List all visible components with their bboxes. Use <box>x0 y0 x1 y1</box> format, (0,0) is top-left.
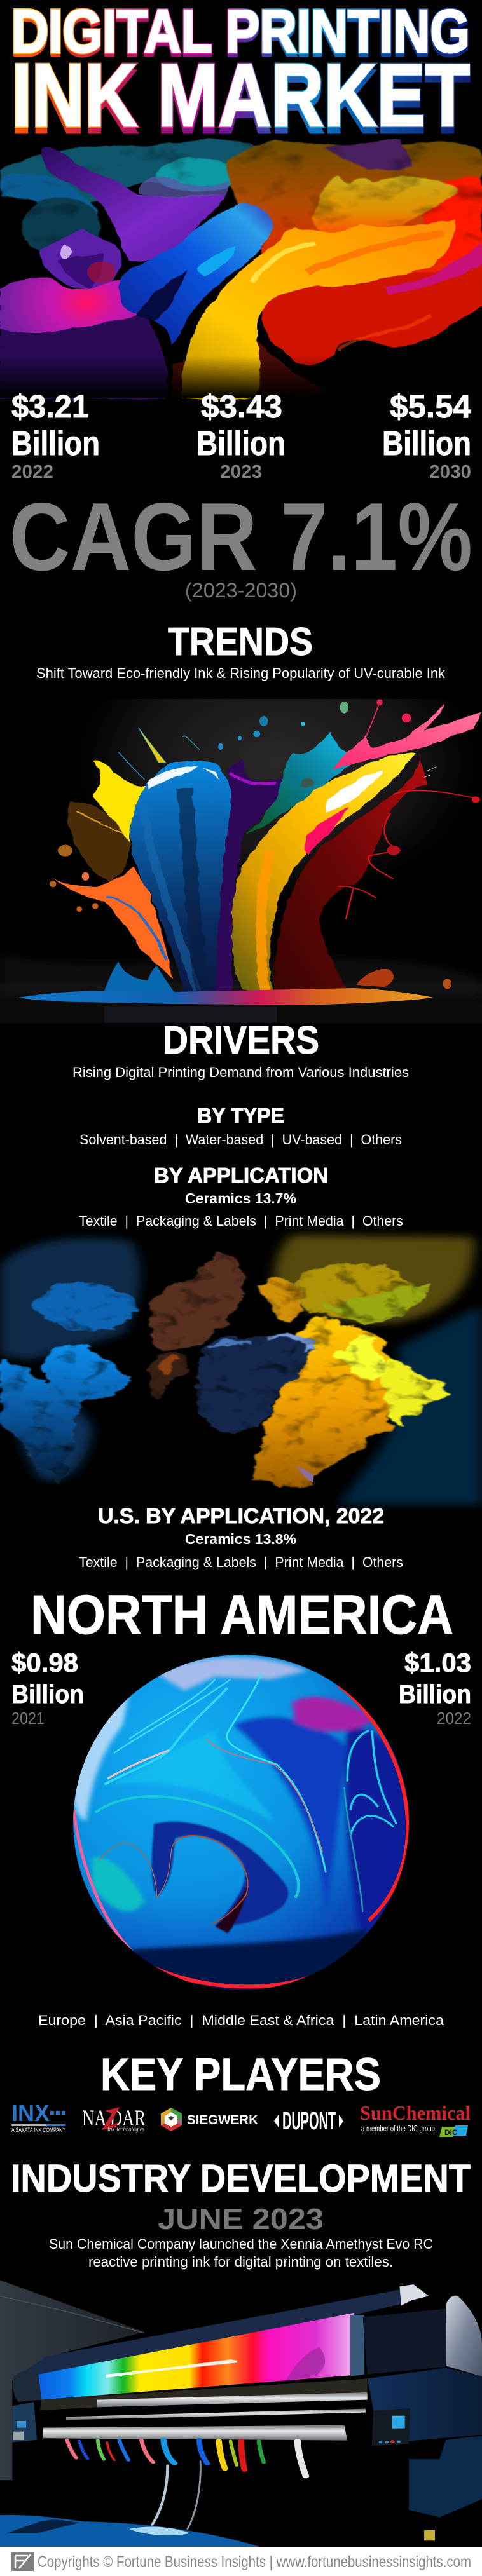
market size 2030: 2030 <box>429 462 471 482</box>
North America value 2021: 2021 <box>11 1709 45 1728</box>
logo: Sun Chemical: a member of the DIC group <box>361 2124 435 2133</box>
market size 2022 <box>11 388 100 482</box>
logo: INX <box>11 2100 65 2133</box>
image: wide-format printer <box>0 2280 482 2547</box>
type segments: Solvent-based | Water-based | UV-based | Others <box>79 1132 402 1148</box>
image: paint splash <box>0 699 482 1023</box>
logo: Nazdar: NA DAR <box>82 2105 146 2131</box>
market size 2022: 2022 <box>11 462 53 482</box>
North America value 2022: 2022 <box>437 1709 471 1728</box>
image: ink smoke clouds <box>0 1235 482 1505</box>
logo: Siegwerk <box>161 2108 258 2131</box>
logo: Sun Chemical: SunChemical <box>360 2101 471 2124</box>
other regions: Europe | Asia Pacific | Middle East & Africa | Latin America <box>38 2012 444 2028</box>
logo: Nazdar <box>82 2105 146 2133</box>
heading: by application: BY APPLICATION <box>154 1163 328 1187</box>
logo: INX: INX <box>11 2100 50 2126</box>
CAGR period: (2023-2030) <box>185 579 297 602</box>
market size 2022: $3.21 <box>11 388 89 424</box>
ceramics share: Ceramics 13.7% <box>185 1190 296 1207</box>
hero image: colourful ink swirl <box>0 139 482 399</box>
footer logo <box>11 2552 34 2571</box>
title <box>11 0 470 151</box>
footer bar <box>0 2547 482 2576</box>
market size 2030: $5.54 <box>390 388 472 424</box>
market size 2023: Billion <box>196 424 286 463</box>
heading: by type: BY TYPE <box>197 1104 284 1127</box>
logo: INX: A SAKATA INX COMPANY <box>11 2127 65 2133</box>
North America value 2022 <box>399 1648 471 1728</box>
drivers text: Rising Digital Printing Demand from Various Industries <box>72 1064 409 1080</box>
market size 2030 <box>382 388 472 482</box>
North America value 2021: $0.98 <box>11 1648 78 1678</box>
heading: key players: KEY PLAYERS <box>100 2050 381 2100</box>
logo: DuPont: DUPONT <box>282 2107 336 2135</box>
heading: US by application: U.S. BY APPLICATION, 2022 <box>98 1504 384 1528</box>
development date: JUNE 2023 <box>158 2202 324 2235</box>
US application segments: Textile | Packaging & Labels | Print Media | Others <box>79 1554 403 1570</box>
North America value 2022: $1.03 <box>404 1648 471 1678</box>
market size 2022: Billion <box>11 424 100 463</box>
US ceramics share: Ceramics 13.8% <box>185 1531 296 1547</box>
development description: Sun Chemical Company launched the Xennia Amethyst Evo RC <box>49 2236 433 2252</box>
development description: reactive printing ink for digital printing on textiles. <box>88 2254 393 2270</box>
market size 2023: $3.43 <box>201 388 282 424</box>
heading: drivers: DRIVERS <box>163 1019 319 1062</box>
logo: Sun Chemical <box>360 2101 471 2137</box>
development description <box>49 2236 433 2270</box>
North America value 2021: Billion <box>11 1679 84 1709</box>
North America value 2022: Billion <box>399 1679 471 1709</box>
logo: Sun Chemical: DIC <box>444 2128 458 2137</box>
logo: DuPont <box>274 2107 343 2135</box>
logo: Nazdar: Ink Technologies <box>107 2125 144 2133</box>
trends text: Shift Toward Eco-friendly Ink & Rising Popularity of UV-curable Ink <box>36 665 446 681</box>
market size 2023: 2023 <box>220 462 262 482</box>
image: marbled globe <box>73 1655 412 1997</box>
application segments: Textile | Packaging & Labels | Print Media | Others <box>79 1213 403 1229</box>
North America value 2021 <box>11 1648 84 1728</box>
logo: Siegwerk: SIEGWERK <box>187 2113 258 2127</box>
heading: trends: TRENDS <box>168 620 313 664</box>
market size 2023 <box>196 388 286 482</box>
